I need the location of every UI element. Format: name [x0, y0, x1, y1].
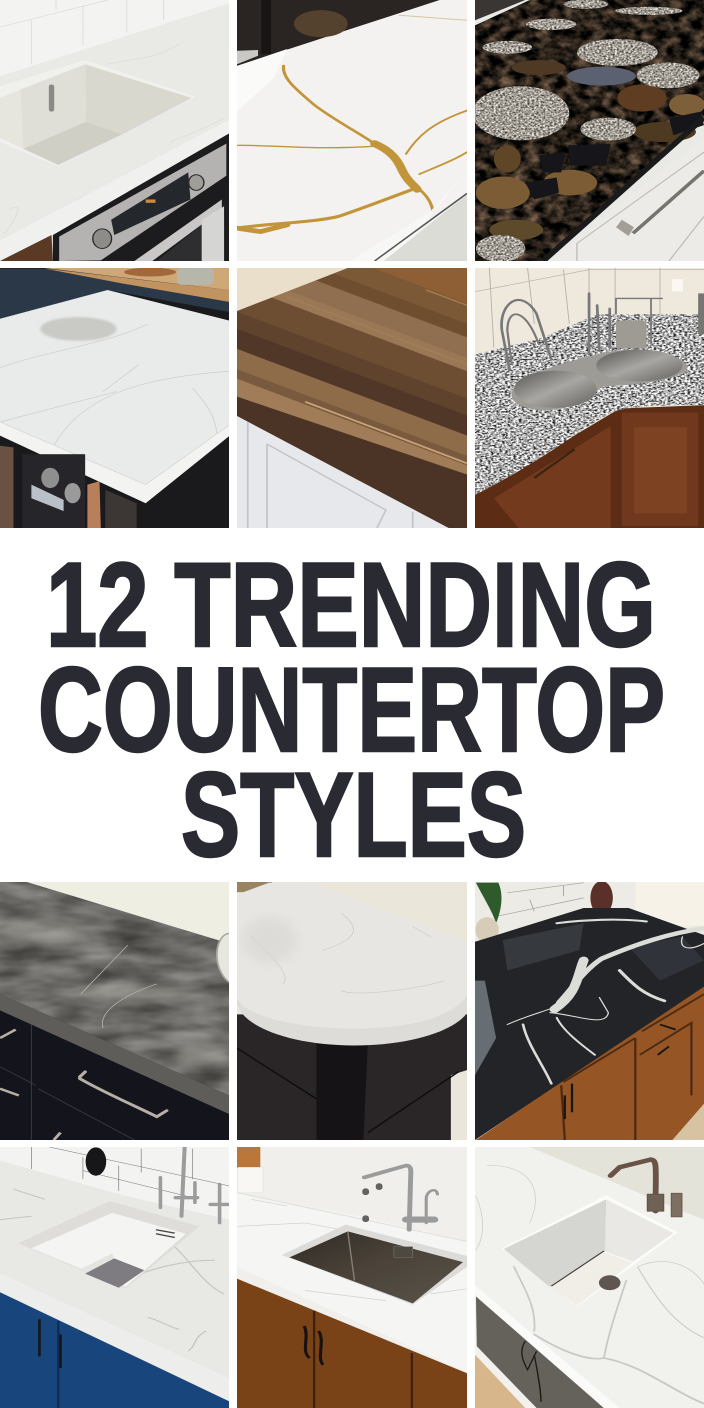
- panel: calacatta quartz with white sink and bronze faucet: [475, 1147, 704, 1408]
- granite slab: [475, 0, 704, 261]
- chrome faucets: [160, 1147, 229, 1223]
- slab edge: [0, 1274, 229, 1401]
- marble surface: [0, 1161, 229, 1378]
- panel: walnut butcher block: [237, 268, 467, 528]
- gloss highlight on surface: [237, 49, 287, 112]
- panel: black marble with white veins: [475, 882, 704, 1140]
- wall switch: [238, 1167, 263, 1193]
- slab edge: [0, 422, 229, 503]
- bright window: [635, 882, 704, 926]
- wood strips: [237, 128, 467, 476]
- mug: [217, 933, 229, 982]
- faucets: [502, 293, 704, 370]
- dark curved cabinet: [237, 1014, 467, 1140]
- drawer fronts and handles: [0, 1025, 167, 1140]
- wood cabinets: [475, 405, 704, 528]
- calacatta veins: [476, 1165, 704, 1404]
- countertop front edge: [0, 120, 229, 261]
- wooden shelf with jars: [45, 268, 229, 302]
- marble countertop surface: [0, 3, 229, 241]
- counter edge: [237, 991, 467, 1045]
- white sink: [502, 1195, 678, 1307]
- black patches: [525, 112, 704, 199]
- dark undermount sink: [282, 1225, 467, 1305]
- white veins: [507, 920, 704, 1084]
- slate grey stone: [567, 67, 636, 86]
- white cabinet drawer: [550, 137, 704, 261]
- round speckled stones: [472, 0, 700, 262]
- brown patches: [476, 60, 704, 240]
- counter edge: [543, 118, 704, 261]
- cabinet and floor: [475, 1295, 604, 1408]
- panel: grey-veined marble with white sink and navy cabinets: [0, 1147, 229, 1408]
- wood cabinets: [237, 1279, 467, 1408]
- marble slab top: [0, 290, 229, 485]
- panel: white stone with gold veins: [237, 0, 467, 261]
- white cabinet door: [237, 416, 449, 528]
- dark kitchen background: [237, 0, 440, 66]
- front edge shading: [350, 171, 467, 261]
- panel: speckled granite with double steel sink: [475, 268, 704, 528]
- panel: dark granite with round stone inclusions: [475, 0, 704, 261]
- cabinet below counter: [384, 194, 467, 261]
- white counter: [237, 1193, 467, 1372]
- beige wall: [237, 268, 348, 311]
- concrete slab: [0, 882, 229, 1095]
- base: oven and wood post: [0, 446, 137, 528]
- oven: [53, 134, 229, 261]
- wood cabinets: [476, 984, 704, 1140]
- black marble slab: [475, 908, 704, 1140]
- sink: [0, 60, 196, 166]
- panel: white quartz counter with undermount sink and oven: [0, 0, 229, 261]
- title: [38, 538, 665, 882]
- navy cabinets: [0, 1284, 229, 1408]
- rounded counter top: [237, 883, 467, 1029]
- plant and vase: [475, 881, 613, 943]
- panel: charcoal concrete counter: [0, 882, 229, 1140]
- pale wall: [530, 1147, 704, 1220]
- wall disc: [86, 1147, 106, 1176]
- bronze faucet: [611, 1159, 682, 1217]
- counter-wall joint: [237, 1193, 467, 1242]
- sink: [18, 1201, 199, 1289]
- double steel sink: [512, 349, 688, 410]
- navy wall: [0, 269, 229, 320]
- title: STYLES: [181, 748, 526, 882]
- slab edge: [0, 994, 229, 1114]
- gold veins: [237, 15, 467, 232]
- panel: rounded white counter: [237, 882, 467, 1140]
- panel: white marble island: [0, 268, 229, 528]
- chrome faucet: [364, 1166, 437, 1230]
- cream switch plate: [672, 279, 683, 291]
- wood front edge: [237, 397, 467, 528]
- countertop lower edge: [475, 1285, 620, 1408]
- panel: white quartz with dark steel sink and wood cabinets: [237, 1147, 467, 1408]
- cream wall: [22, 882, 229, 943]
- granite countertop: [475, 314, 704, 495]
- wood base: [0, 235, 53, 261]
